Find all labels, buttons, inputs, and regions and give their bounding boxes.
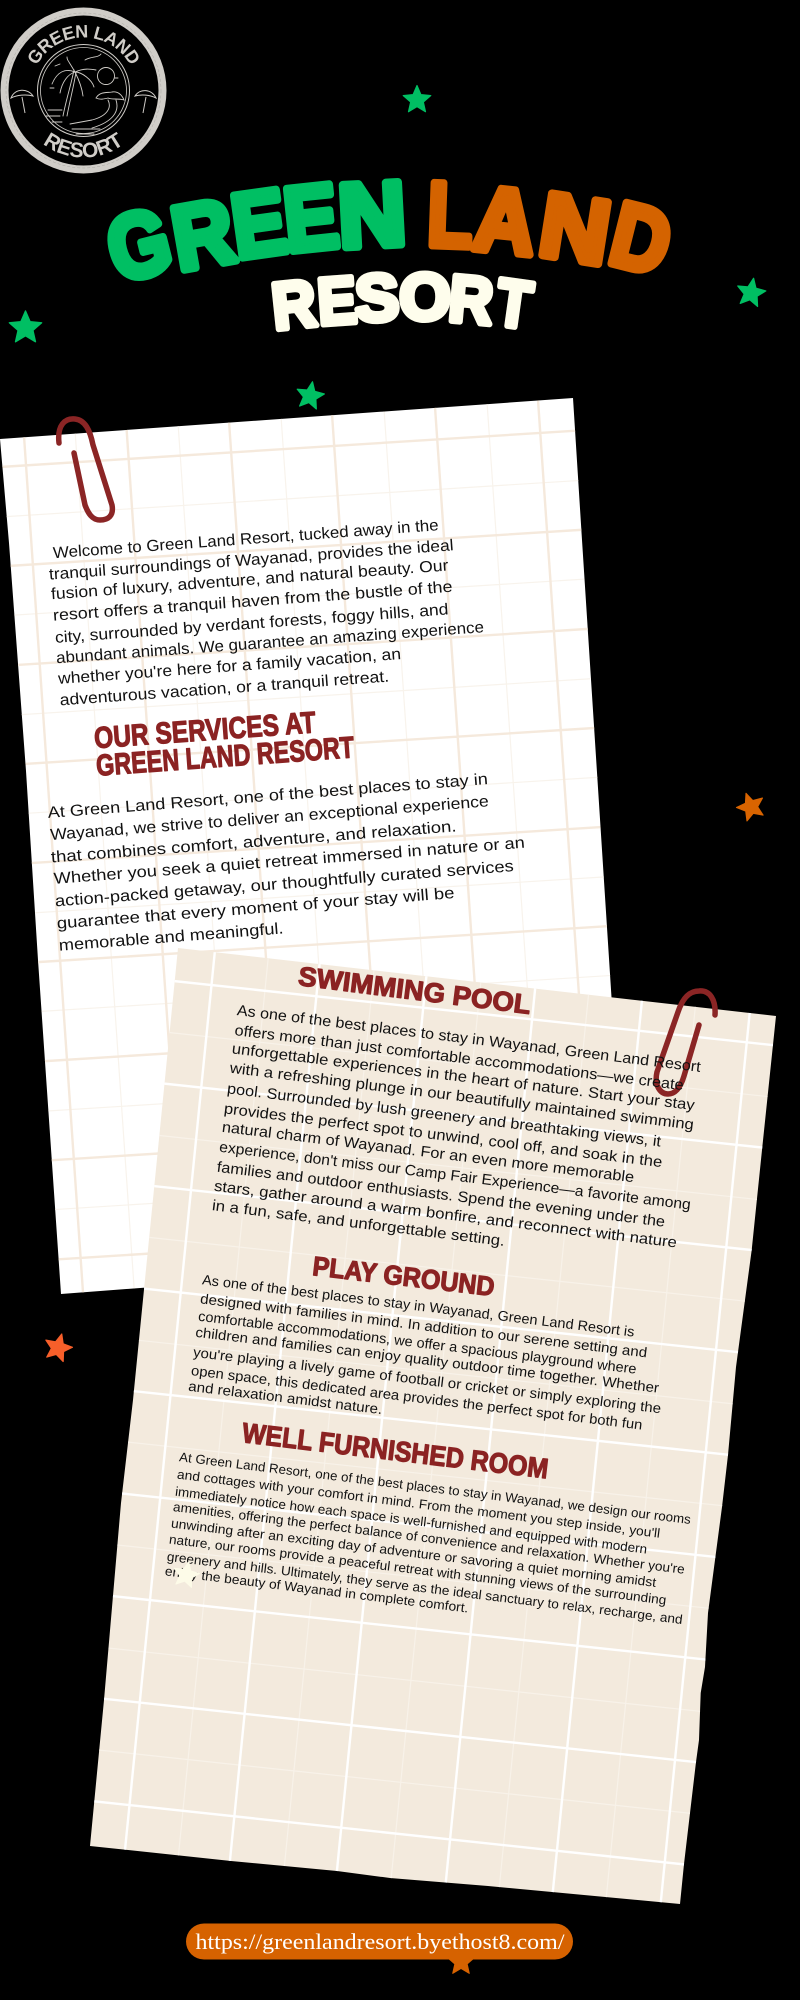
title word: LAND: L — [426, 164, 474, 267]
title word: GREEN: E — [225, 170, 293, 278]
title word: LAND — [426, 164, 681, 296]
text: swimming pool paragraph: provides the perfect spot to unwind, cool off, and soak in the — [223, 1100, 663, 1171]
title word: GREEN: E — [279, 165, 343, 272]
title word: RESORT — [268, 260, 536, 344]
title word: GREEN — [97, 162, 408, 301]
title word: RESORT: E — [315, 264, 359, 340]
text: play ground paragraph: designed with families in mind. In addition to our serene setting and — [199, 1290, 648, 1360]
text: welcome paragraph: city, surrounded by verdant forests, foggy hills, and — [54, 601, 449, 647]
text: play ground paragraph: and relaxation amidst nature. — [188, 1378, 383, 1417]
icon: paper clip right — [656, 991, 715, 1094]
text: swimming pool paragraph: families and outdoor enthusiasts. Spend the evening under the — [216, 1159, 666, 1231]
heading: our services: GREEN LAND RESORT — [95, 731, 355, 783]
link pill — [186, 1924, 573, 1960]
logo: Green Land Resort badge: RESORT — [44, 132, 120, 158]
text: play ground paragraph: open space, this dedicated area provides the perfect spot for both fun — [190, 1362, 643, 1433]
text: well furnished room paragraph: At Green Land Resort, one of the best places to stay in Wayanad, we design our rooms — [178, 1449, 692, 1527]
star: green right — [735, 276, 768, 307]
text: services paragraph: that combines comfort, adventure, and relaxation. — [50, 818, 457, 866]
text: well furnished room paragraph: immediately notice how each space is well-furnished and equipped with modern — [174, 1484, 648, 1557]
star: orange behind link — [448, 1948, 474, 1973]
text: welcome paragraph: resort offers a tranquil haven from the bustle of the — [52, 579, 453, 625]
text: swimming pool paragraph: As one of the best places to stay in Wayanad, Green Land Resort — [236, 1002, 702, 1076]
panel: white welcome paper — [0, 398, 612, 1294]
text: services paragraph: guarantee that every moment of your stay will be — [56, 885, 455, 933]
heading: play ground: PLAY GROUND — [311, 1251, 496, 1302]
text: welcome paragraph: adventurous vacation, or a tranquil retreat. — [59, 669, 390, 709]
text: swimming pool paragraph: experience, don't miss our Camp Fair Experience—a favorite among — [218, 1139, 692, 1214]
text: well furnished room paragraph: enjoy the beauty of Wayanad in complete comfort. — [164, 1563, 469, 1616]
text: services paragraph: memorable and meaningful. — [58, 920, 284, 955]
text: welcome paragraph — [48, 517, 485, 709]
text: play ground paragraph: you're playing a lively game of football or cricket or simply exploring the — [192, 1344, 662, 1416]
title word: GREEN: R — [164, 179, 242, 290]
panel: beige services paper — [90, 948, 776, 1904]
text: swimming pool paragraph: stars, gather around a warm bonfire, and reconnect with nature — [213, 1178, 678, 1251]
title word: GREEN: N — [335, 162, 408, 267]
title word: LAND: N — [533, 173, 617, 284]
text: well furnished room paragraph: greenery and hills. Ultimately, they serve as the ideal sanctuary to relax, recharge, and — [166, 1549, 683, 1627]
text: well furnished room paragraph: amenities, offering the perfect balance of convenience and relaxation. Whether you're — [172, 1499, 686, 1577]
text: well furnished room paragraph: unwinding after an exciting day of adventure or savoring a quiet morning amidst — [170, 1515, 657, 1590]
star: cream on paper — [171, 1559, 201, 1588]
logo: Green Land Resort badge — [0, 8, 166, 174]
title: Green Land Resort — [97, 162, 681, 344]
heading: our services: OUR SERVICES AT — [93, 706, 317, 755]
text: swimming pool paragraph: pool. Surrounded by lush greenery and breathtaking views, it — [226, 1080, 663, 1151]
text: play ground paragraph: comfortable accommodations, we offer a spacious playground where — [197, 1308, 638, 1377]
title word: LAND: A — [469, 166, 541, 275]
text: services paragraph: Whether you seek a quiet retreat immersed in nature or an — [53, 835, 525, 888]
title word: RESORT: R — [268, 267, 320, 344]
text: swimming pool paragraph — [211, 1002, 702, 1251]
text: services paragraph: Wayanad, we strive to deliver an exceptional experience — [50, 793, 490, 844]
title word: RESORT: S — [354, 260, 400, 335]
text: play ground paragraph: As one of the best places to stay in Wayanad, Green Land Resort is — [201, 1271, 635, 1340]
star: green above paper — [294, 379, 326, 410]
link pill: https://greenlandresort.byethost8.com/ — [196, 1929, 565, 1954]
star: green top centre — [403, 86, 431, 112]
text: welcome paragraph: abundant animals. We guarantee an amazing experience — [56, 619, 485, 667]
text: welcome paragraph: tranquil surroundings of Wayanad, provides the ideal — [48, 537, 454, 584]
title word: RESORT: T — [492, 265, 536, 344]
text: swimming pool paragraph: with a refreshing plunge in our beautifully maintained swimming — [228, 1060, 695, 1134]
logo: Green Land Resort badge: GREEN LAND — [28, 25, 138, 64]
text: swimming pool paragraph: offers more than just comfortable accommodations—we create — [234, 1022, 685, 1094]
text: well furnished room paragraph — [164, 1449, 692, 1627]
text: services paragraph — [47, 771, 525, 955]
text: welcome paragraph: whether you're here for a family vacation, an — [56, 646, 402, 688]
text: swimming pool paragraph: unforgettable experiences in the heart of nature. Start your stay — [231, 1040, 696, 1114]
title word: RESORT: O — [399, 260, 451, 334]
star: green left — [9, 311, 42, 342]
text: swimming pool paragraph: in a fun, safe, and unforgettable setting. — [211, 1197, 506, 1250]
text: well furnished room paragraph: and cottages with your comfort in mind. From the moment you step inside, you'll — [176, 1467, 661, 1541]
title word: GREEN: G — [97, 188, 181, 301]
heading: well furnished room: WELL FURNISHED ROOM — [240, 1417, 550, 1484]
text: well furnished room paragraph: nature, our rooms provide a peaceful retreat with stunning views of the surrounding — [168, 1532, 667, 1608]
text: welcome paragraph: Welcome to Green Land Resort, tucked away in the — [52, 517, 439, 562]
title word: RESORT: R — [446, 262, 496, 339]
text: services paragraph: At Green Land Resort, one of the best places to stay in — [47, 771, 489, 822]
star: orange left — [42, 1330, 75, 1363]
star: orange right — [733, 789, 768, 823]
text: swimming pool paragraph: natural charm of Wayanad. For an even more memorable — [221, 1119, 635, 1186]
heading: our services — [93, 706, 355, 783]
text: welcome paragraph: fusion of luxury, adventure, and natural beauty. Our — [50, 557, 450, 603]
text: services paragraph: action-packed getaway, our thoughtfully curated services — [54, 858, 514, 910]
text: play ground paragraph — [188, 1271, 662, 1433]
heading: swimming pool: SWIMMING POOL — [297, 961, 533, 1020]
title word: LAND: D — [601, 183, 681, 296]
text: play ground paragraph: children and families can enjoy quality outdoor time together. Whether — [195, 1324, 660, 1396]
icon: paper clip left — [59, 419, 112, 520]
